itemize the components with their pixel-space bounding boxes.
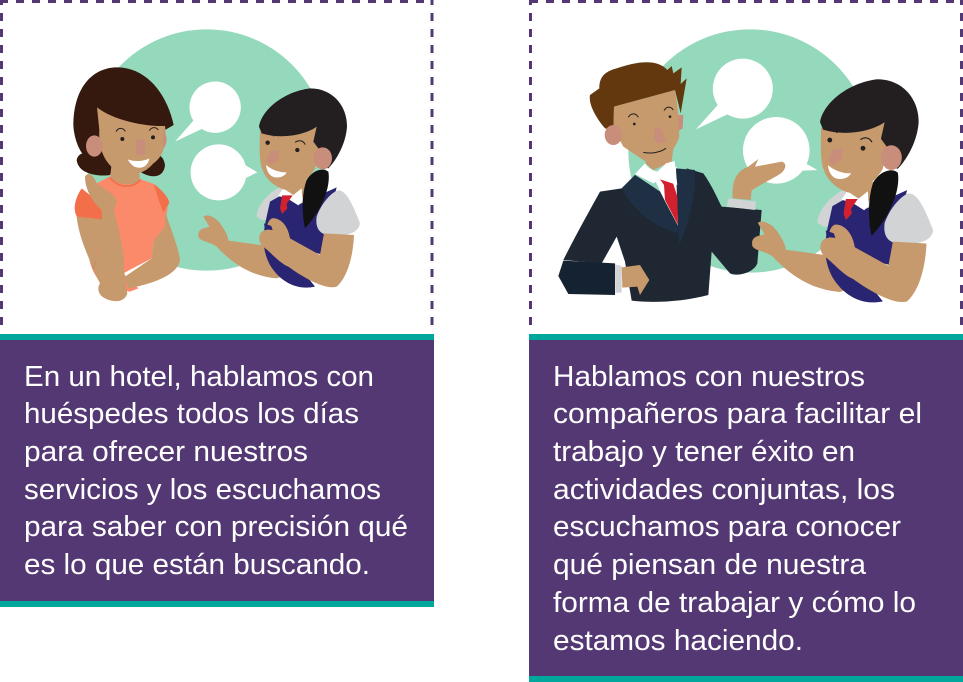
green circle background	[86, 29, 327, 271]
panel: hotel guests illustration frame	[0, 0, 433, 332]
character: receptionist	[752, 79, 933, 302]
text block: coworkers: compañeros para facilitar el	[553, 398, 922, 430]
text block: coworkers	[553, 361, 922, 657]
text block: coworkers: trabajo y tener éxito en	[553, 436, 855, 468]
panel: hotel guests text	[0, 334, 434, 607]
text block: hotel guests: En un hotel, hablamos con	[24, 361, 374, 393]
text block: coworkers: actividades conjuntas, los	[553, 474, 895, 506]
speech bubble: coworker	[696, 59, 773, 129]
text block: coworkers: Hablamos con nuestros	[553, 361, 865, 393]
character: receptionist	[198, 88, 360, 288]
panel: coworkers text	[529, 334, 963, 682]
text block: hotel guests: servicios y los escuchamos	[24, 474, 381, 506]
text block: coworkers: estamos haciendo.	[553, 625, 803, 657]
text block: coworkers: qué piensan de nuestra	[553, 549, 866, 581]
green circle background	[628, 29, 872, 273]
speech bubble: guest	[175, 82, 241, 142]
text block: coworkers: forma de trabajar y cómo lo	[553, 587, 916, 619]
character: guest woman	[73, 67, 180, 301]
illustration: coworker and receptionist talking	[558, 29, 933, 302]
character: coworker man	[558, 62, 785, 302]
text block: hotel guests: es lo que están buscando.	[24, 549, 370, 581]
speech bubble: receptionist	[191, 144, 257, 200]
text block: hotel guests: huéspedes todos los días	[24, 398, 359, 430]
panel: coworkers illustration frame	[530, 0, 963, 332]
text block: hotel guests	[24, 361, 408, 581]
text block: hotel guests: para ofrecer nuestros	[24, 436, 308, 468]
illustration: guest and receptionist talking	[73, 29, 360, 301]
text block: coworkers: escuchamos para conocer	[553, 511, 902, 543]
speech bubble: receptionist	[743, 117, 817, 184]
text block: hotel guests: para saber con precisión qué	[24, 511, 408, 543]
